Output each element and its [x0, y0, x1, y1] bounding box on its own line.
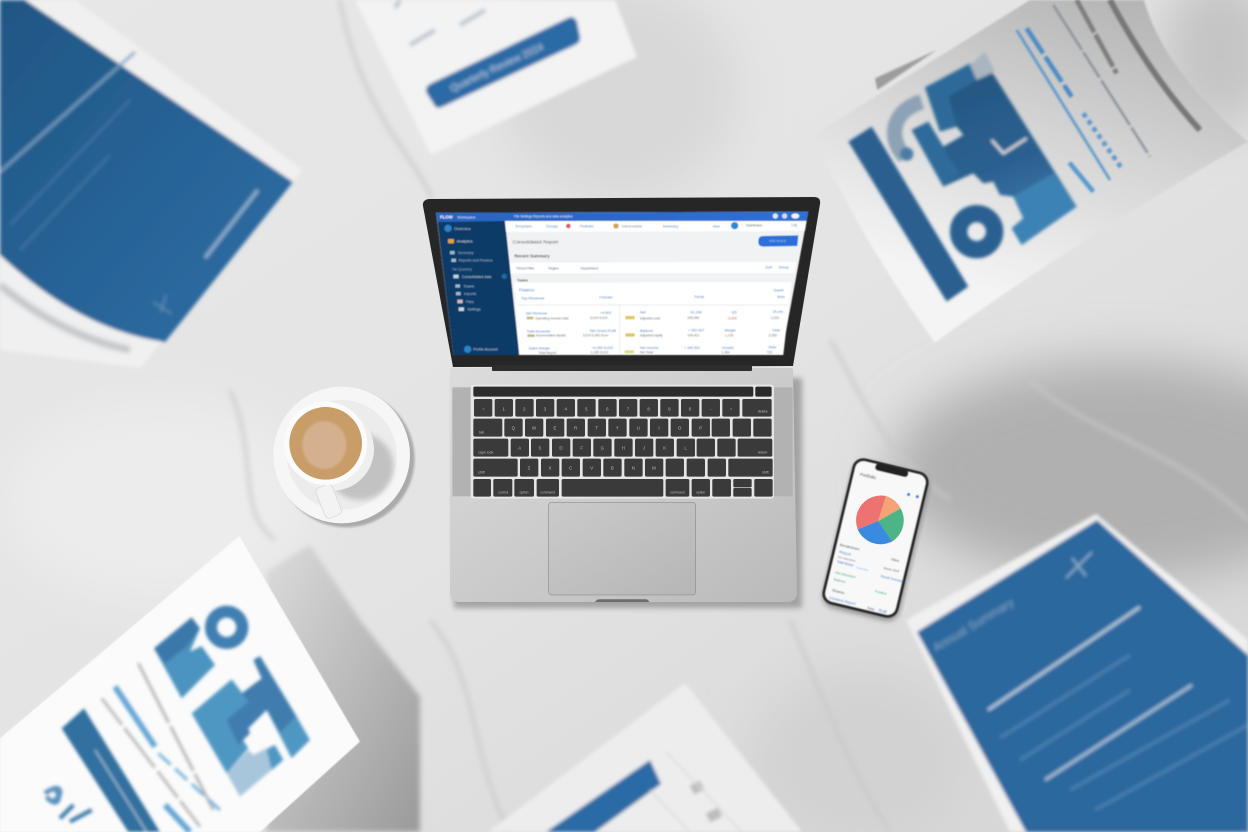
phone body and screen: Total	[866, 606, 875, 612]
phone body and screen: Shares	[832, 587, 845, 595]
data table card: Adjusted cost	[640, 316, 660, 320]
key legends: =	[730, 407, 733, 412]
data table card: Q3	[732, 310, 737, 314]
sidebar: Reports and Finance	[459, 258, 493, 262]
cup handle	[315, 483, 343, 520]
key legends: 0	[689, 407, 692, 412]
data table card: Net Income	[640, 346, 659, 350]
key legends: X	[549, 465, 552, 470]
key legends: H	[622, 445, 625, 450]
phone body and screen: Equity 2024	[883, 566, 900, 573]
sidebar: Overview	[454, 226, 471, 231]
top blue bar: FLOW	[440, 215, 454, 220]
data table card: 105,402	[687, 334, 699, 338]
data table card: 3,019 5,010	[590, 316, 608, 320]
phone body and screen: Result Overview	[880, 574, 904, 584]
top blue bar	[436, 212, 808, 222]
filter row: Period Filter	[516, 266, 535, 270]
data table card: 3,019 5,382 Euro	[583, 334, 608, 338]
saucer	[273, 387, 410, 523]
data table card: Total Report	[538, 351, 556, 355]
phone body and screen: Dividend Report	[829, 596, 857, 606]
key legends: Y	[616, 425, 619, 430]
data table card: Growth	[722, 346, 734, 350]
sidebar: Imports	[464, 292, 476, 296]
sidebar: Files	[466, 300, 474, 304]
hinge	[492, 365, 752, 371]
shadow sheet	[267, 545, 420, 832]
phone	[820, 456, 931, 623]
key legends: shift	[478, 470, 485, 474]
navigation bar	[505, 221, 807, 232]
key legends: 6	[606, 407, 609, 412]
data table card: More	[777, 295, 785, 299]
subheading: Recent Summary	[514, 253, 550, 258]
keyboard deck zoom frame	[452, 385, 793, 602]
cup body	[291, 408, 374, 491]
phone body and screen: Roll	[878, 608, 887, 615]
key legends: I	[658, 425, 660, 430]
key legends	[478, 407, 769, 494]
curved text lines	[1017, 0, 1200, 192]
data table card: Net Gross Profit	[590, 329, 616, 333]
sidebar: Consolidated data	[462, 275, 492, 279]
pie chart	[856, 496, 904, 544]
paper: bottom right report	[906, 514, 1248, 832]
slice: green	[878, 508, 904, 541]
sidebar: Tab Quarterly	[452, 267, 472, 271]
filter row: Department	[581, 266, 598, 270]
key legends: 9	[668, 407, 671, 412]
laptop	[423, 197, 820, 608]
sidebar: Settings	[467, 308, 481, 312]
data table card: Net	[640, 311, 646, 315]
key legends: M	[652, 465, 656, 470]
data table card: Balance	[640, 329, 653, 333]
data table card: Export	[774, 288, 784, 292]
key legends: B	[611, 465, 614, 470]
filter row	[510, 262, 796, 273]
phone body and screen: Value	[891, 557, 900, 563]
key legends: option	[696, 490, 705, 494]
filter row: Group	[779, 266, 789, 270]
key legends: return	[758, 450, 767, 454]
data table card: 25.0%	[773, 310, 784, 314]
data table card	[514, 282, 792, 355]
paper: top left report	[0, 0, 303, 368]
paper: top centre report	[355, 0, 637, 155]
key legends: control	[498, 490, 509, 494]
data table card: Sales Margin	[529, 346, 550, 350]
navigation bar: Log	[791, 223, 797, 227]
bar and blocks	[848, 52, 1077, 302]
data table card: Net Total	[640, 351, 653, 355]
paper: bottom left report	[0, 536, 420, 832]
key legends: delete	[758, 410, 768, 414]
key legends: O	[678, 425, 682, 430]
top blue bar: File Settings Reports and data analytics	[514, 214, 573, 218]
data table card: Net Revenue	[526, 311, 547, 315]
key legends: V	[590, 465, 593, 470]
data table card: Trends	[694, 295, 705, 299]
navigation bar: Summary	[663, 224, 678, 228]
paper: bottom right report: Annual Summary	[930, 595, 1016, 655]
data table card: +4,502	[600, 311, 611, 315]
phone body and screen: Net allocation	[838, 555, 857, 563]
slice: blue	[858, 521, 892, 544]
data table card: + 340,501	[684, 346, 700, 350]
paper flap behind	[875, 50, 937, 90]
key legends: J	[643, 445, 645, 450]
data table card: -3,405	[727, 316, 737, 320]
navigation bar: Templates	[515, 225, 532, 229]
phone body and screen: Total Return	[836, 560, 854, 568]
data table card: 81,209	[691, 311, 702, 315]
key legends: Z	[528, 465, 531, 470]
key legends: L	[684, 445, 687, 450]
crema	[302, 421, 346, 469]
data table card: Top Revenue	[521, 295, 545, 300]
sidebar: Summary	[458, 251, 474, 255]
laptop base	[450, 368, 797, 602]
primary button	[758, 235, 798, 247]
trackpad	[549, 502, 696, 595]
key legends: G	[601, 445, 605, 450]
key legends: A	[518, 445, 521, 450]
primary button: Add record	[769, 239, 786, 243]
data table card: 1,020	[771, 316, 779, 320]
key legends: 5	[585, 407, 588, 412]
data table card: Forecast	[599, 296, 612, 300]
key legends: R	[574, 425, 577, 430]
phone body and screen	[820, 456, 931, 620]
data table card: Operating income total	[535, 316, 569, 320]
key legends: caps lock	[478, 450, 493, 454]
sidebar	[437, 221, 519, 355]
key legends: command	[670, 490, 685, 494]
key legends: D	[559, 445, 563, 450]
key legends: S	[539, 445, 542, 450]
data table card: + 352,507	[688, 329, 704, 333]
white sheet	[0, 536, 360, 832]
navigation bar: Portfolio	[580, 224, 593, 228]
data table card: 1,285 5,010	[591, 351, 608, 355]
key legends: ~	[482, 407, 485, 412]
key legends: 2	[523, 407, 526, 412]
key legends: 7	[627, 407, 630, 412]
key legends: F	[580, 445, 583, 450]
cup shadow	[327, 433, 393, 500]
display panel	[436, 212, 808, 355]
data table card: Yield	[772, 328, 780, 332]
key legends: 8	[647, 407, 650, 412]
data table card: 205,380	[687, 316, 699, 320]
data table card: Accumulated assets	[536, 334, 566, 338]
paper: top right report	[813, 0, 1248, 343]
saucer shadow	[277, 390, 415, 527]
navigation bar: view	[713, 224, 720, 228]
sidebar: Profile Account	[473, 348, 498, 352]
filter row: Region	[548, 266, 559, 270]
key legends: tab	[479, 430, 484, 434]
data table card: Finance	[519, 287, 535, 292]
key legends: W	[532, 425, 537, 430]
key legends: E	[554, 425, 557, 430]
top blue bar: Workspace	[457, 215, 476, 219]
data table card: Total Accounts	[527, 329, 550, 333]
key legends: K	[663, 445, 666, 450]
key legends: 4	[564, 407, 567, 412]
phone body and screen: Net Allocation	[835, 571, 856, 579]
phone shadow	[821, 459, 931, 623]
phone body and screen: Portfolio	[859, 472, 877, 481]
filter row: Sort	[765, 266, 772, 270]
navigation bar: Groups	[546, 224, 558, 228]
data table card: -1,208	[724, 334, 734, 338]
sidebar: Analytics	[457, 239, 473, 244]
lid notch	[595, 599, 649, 602]
coffee cup and saucer	[273, 387, 415, 527]
curled sheet	[813, 0, 1248, 343]
key legends: P	[699, 425, 702, 430]
data table card: Adjusted equity	[640, 334, 663, 338]
paper: bottom centre report	[488, 683, 802, 832]
key legends: command	[540, 490, 555, 494]
phone body and screen: Balance	[833, 577, 846, 584]
laptop shadow	[454, 378, 802, 608]
keyboard	[471, 385, 774, 499]
speaker grilles	[452, 387, 793, 496]
key legends: Q	[512, 425, 516, 430]
page heading: Consolidated Report	[513, 240, 559, 246]
key legends: shift	[762, 470, 769, 474]
coffee	[289, 407, 362, 480]
key legends: N	[632, 465, 635, 470]
key legends: C	[569, 465, 572, 470]
data table card: 2,050	[769, 334, 777, 338]
slice: orange	[878, 496, 901, 521]
key legends: option	[519, 490, 529, 494]
navigation bar: Dashboard	[746, 223, 762, 227]
key legends: 1	[502, 407, 505, 412]
data table card: 720	[767, 351, 772, 355]
section label: Tasks	[517, 277, 529, 282]
screen frame	[436, 212, 808, 355]
phone body and screen: Report	[839, 549, 852, 557]
data table card: Margin	[725, 329, 736, 333]
phone body and screen: Overview	[856, 565, 870, 572]
large number	[45, 788, 60, 802]
sidebar: Teams	[463, 284, 474, 288]
data table card: 1,284	[721, 351, 730, 355]
data table card: Rate	[769, 346, 776, 350]
key legends: T	[595, 425, 598, 430]
key legends: 3	[544, 407, 547, 412]
slice: red	[856, 496, 886, 529]
navigation bar: Intermediate	[622, 224, 642, 228]
screen lid	[423, 197, 820, 367]
paper: top centre report: Quarterly Review 2024	[449, 42, 546, 95]
phone body and screen: Positive	[875, 589, 887, 596]
cup rim	[284, 402, 367, 485]
key legends: -	[710, 407, 712, 412]
data table card: +4,283 5,010	[592, 346, 613, 350]
key legends: U	[637, 425, 640, 430]
phone body and screen: Breakdown	[839, 542, 860, 551]
